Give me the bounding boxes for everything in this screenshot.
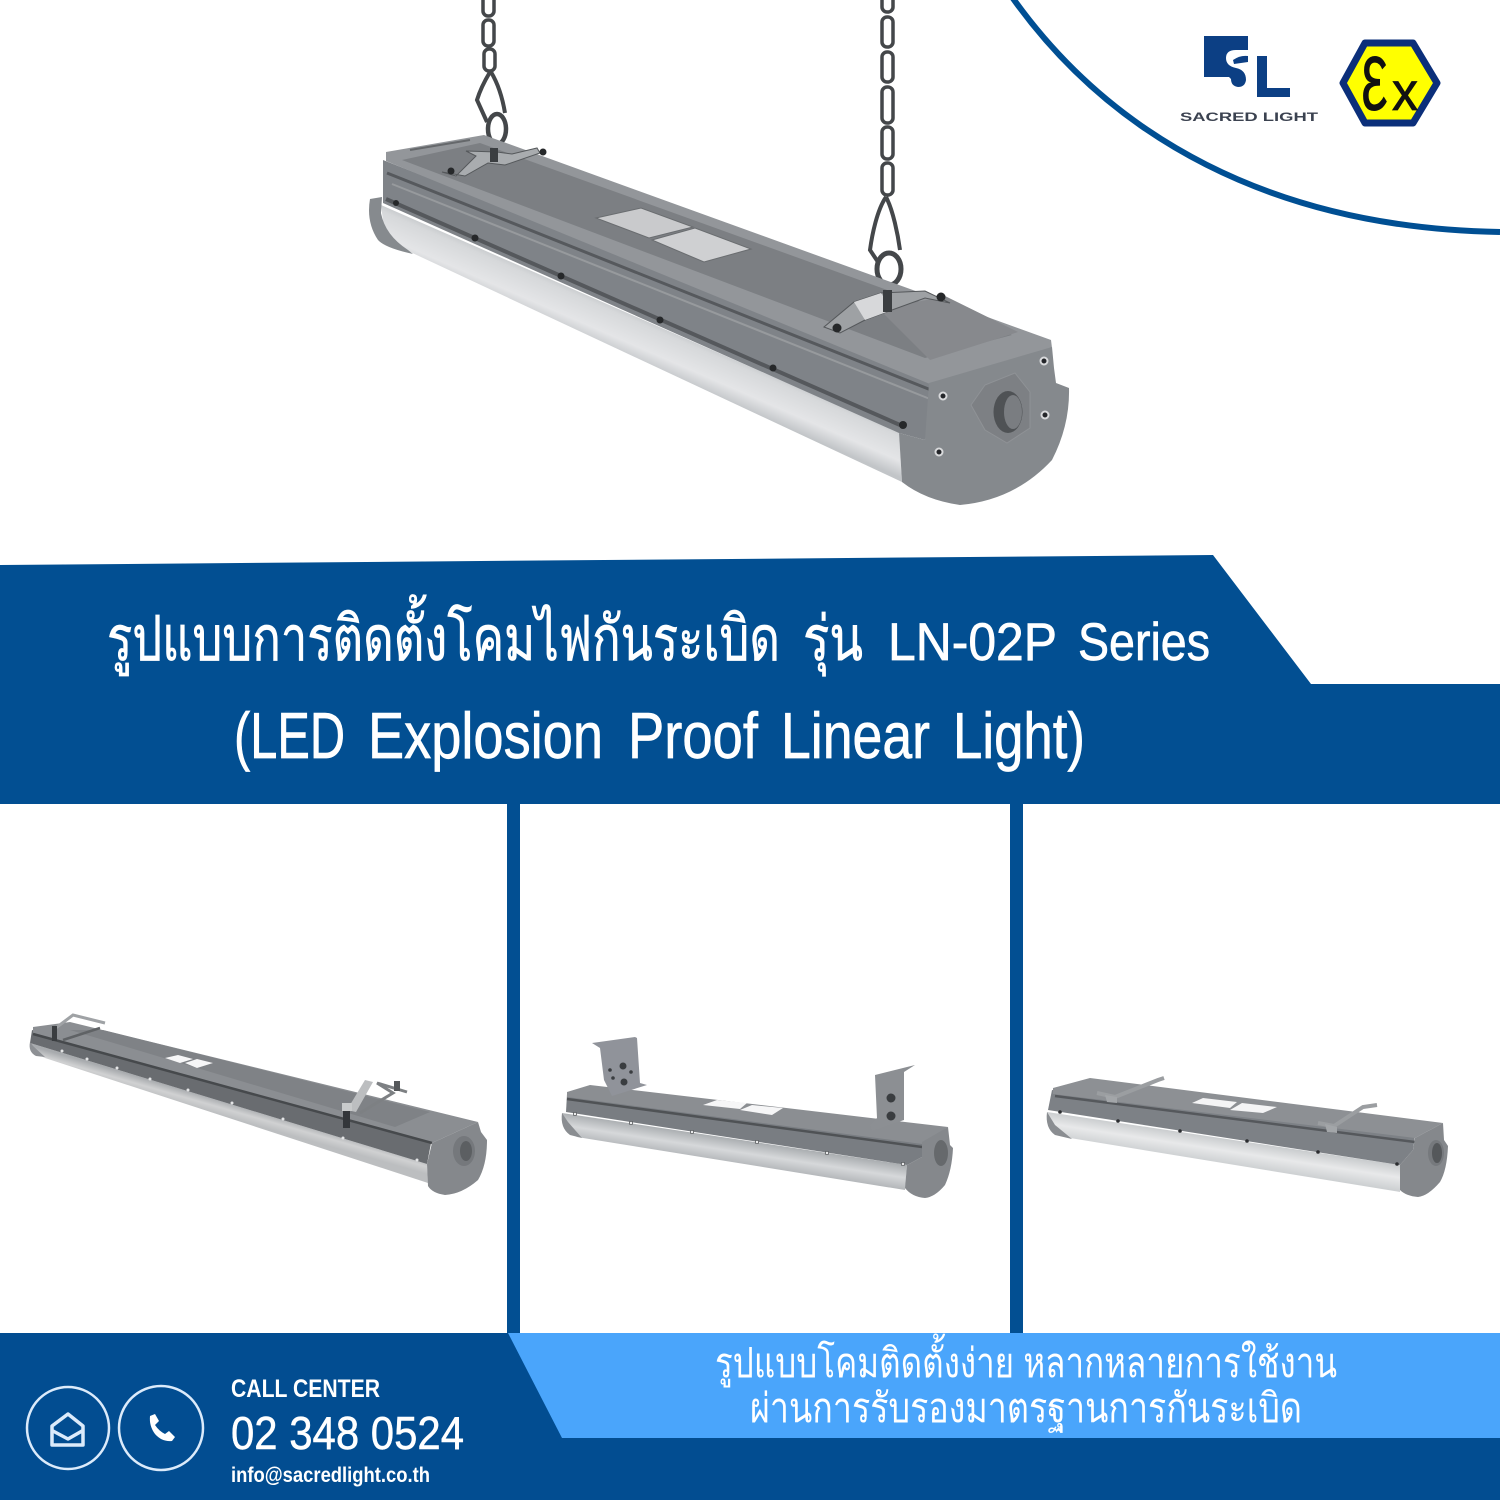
title: Series bbox=[1078, 613, 1210, 672]
right U bracket bbox=[870, 1065, 915, 1131]
icon: phone circle bbox=[119, 1386, 203, 1470]
mount rails bbox=[1097, 1078, 1164, 1097]
Ex certification badge: x bbox=[1392, 62, 1418, 122]
lamp left end cap bbox=[369, 197, 413, 254]
cable gland bbox=[971, 373, 1030, 443]
tagline text bbox=[715, 1333, 1337, 1433]
logo wordmark: SACRED LIGHT bbox=[1180, 110, 1319, 124]
lamp top plate bbox=[386, 135, 1052, 384]
spring clip brackets bbox=[53, 1015, 105, 1030]
footer bar bbox=[0, 1333, 1500, 1500]
name plates bbox=[596, 208, 693, 238]
panel: lamp with flat spring clips bbox=[30, 1015, 487, 1195]
fasteners bbox=[393, 148, 946, 429]
contact block: info@sacredlight.co.th bbox=[231, 1464, 430, 1487]
contact block bbox=[231, 1375, 464, 1487]
top-right curved accent line bbox=[1012, 0, 1500, 232]
Ex certification badge bbox=[1343, 20, 1437, 132]
panel: lamp with adjustable brackets bbox=[562, 1037, 953, 1198]
tagline text: ผ่านการรับรองมาตรฐานการกันระเบิด bbox=[750, 1385, 1302, 1433]
mounting brackets bbox=[442, 148, 540, 176]
seam screws bbox=[60, 1050, 418, 1162]
seam screws bbox=[573, 1112, 905, 1166]
lamp right end cap bbox=[899, 347, 1069, 505]
blue title banner bbox=[0, 555, 1500, 804]
left U bracket bbox=[592, 1037, 647, 1096]
title: LN-02P bbox=[888, 613, 1057, 672]
right hanging chain bbox=[870, 0, 901, 285]
tagline text: รูปแบบโคมติดตั้งง่าย หลากหลายการใช้งาน bbox=[715, 1333, 1337, 1388]
left hanging chain bbox=[477, 0, 506, 160]
title: รูปแบบการติดตั้งโคมไฟกันระเบิด bbox=[107, 594, 780, 676]
title: รุ่น bbox=[803, 605, 863, 676]
lamp lens bbox=[381, 205, 902, 482]
lamp side housing bbox=[383, 160, 940, 440]
contact block: CALL CENTER bbox=[231, 1375, 380, 1403]
end cap screws bbox=[936, 358, 1048, 456]
title: (LED bbox=[234, 699, 345, 772]
title bbox=[107, 594, 1210, 772]
seam screws bbox=[1058, 1110, 1399, 1166]
main hanging lamp product image bbox=[369, 0, 1069, 505]
title: Proof bbox=[628, 699, 759, 772]
Ex certification badge: ε bbox=[1361, 20, 1388, 132]
light blue tagline band bbox=[508, 1333, 1500, 1438]
title: Linear bbox=[781, 699, 930, 772]
Sacred Light logo bbox=[1180, 36, 1319, 124]
title: Light) bbox=[953, 699, 1085, 772]
icon: email circle bbox=[27, 1387, 109, 1469]
contact block: 02 348 0524 bbox=[231, 1407, 464, 1459]
panel: lamp with flat mount rails bbox=[1047, 1078, 1448, 1197]
title: Explosion bbox=[368, 699, 603, 772]
panel dividers bbox=[507, 804, 1023, 1334]
